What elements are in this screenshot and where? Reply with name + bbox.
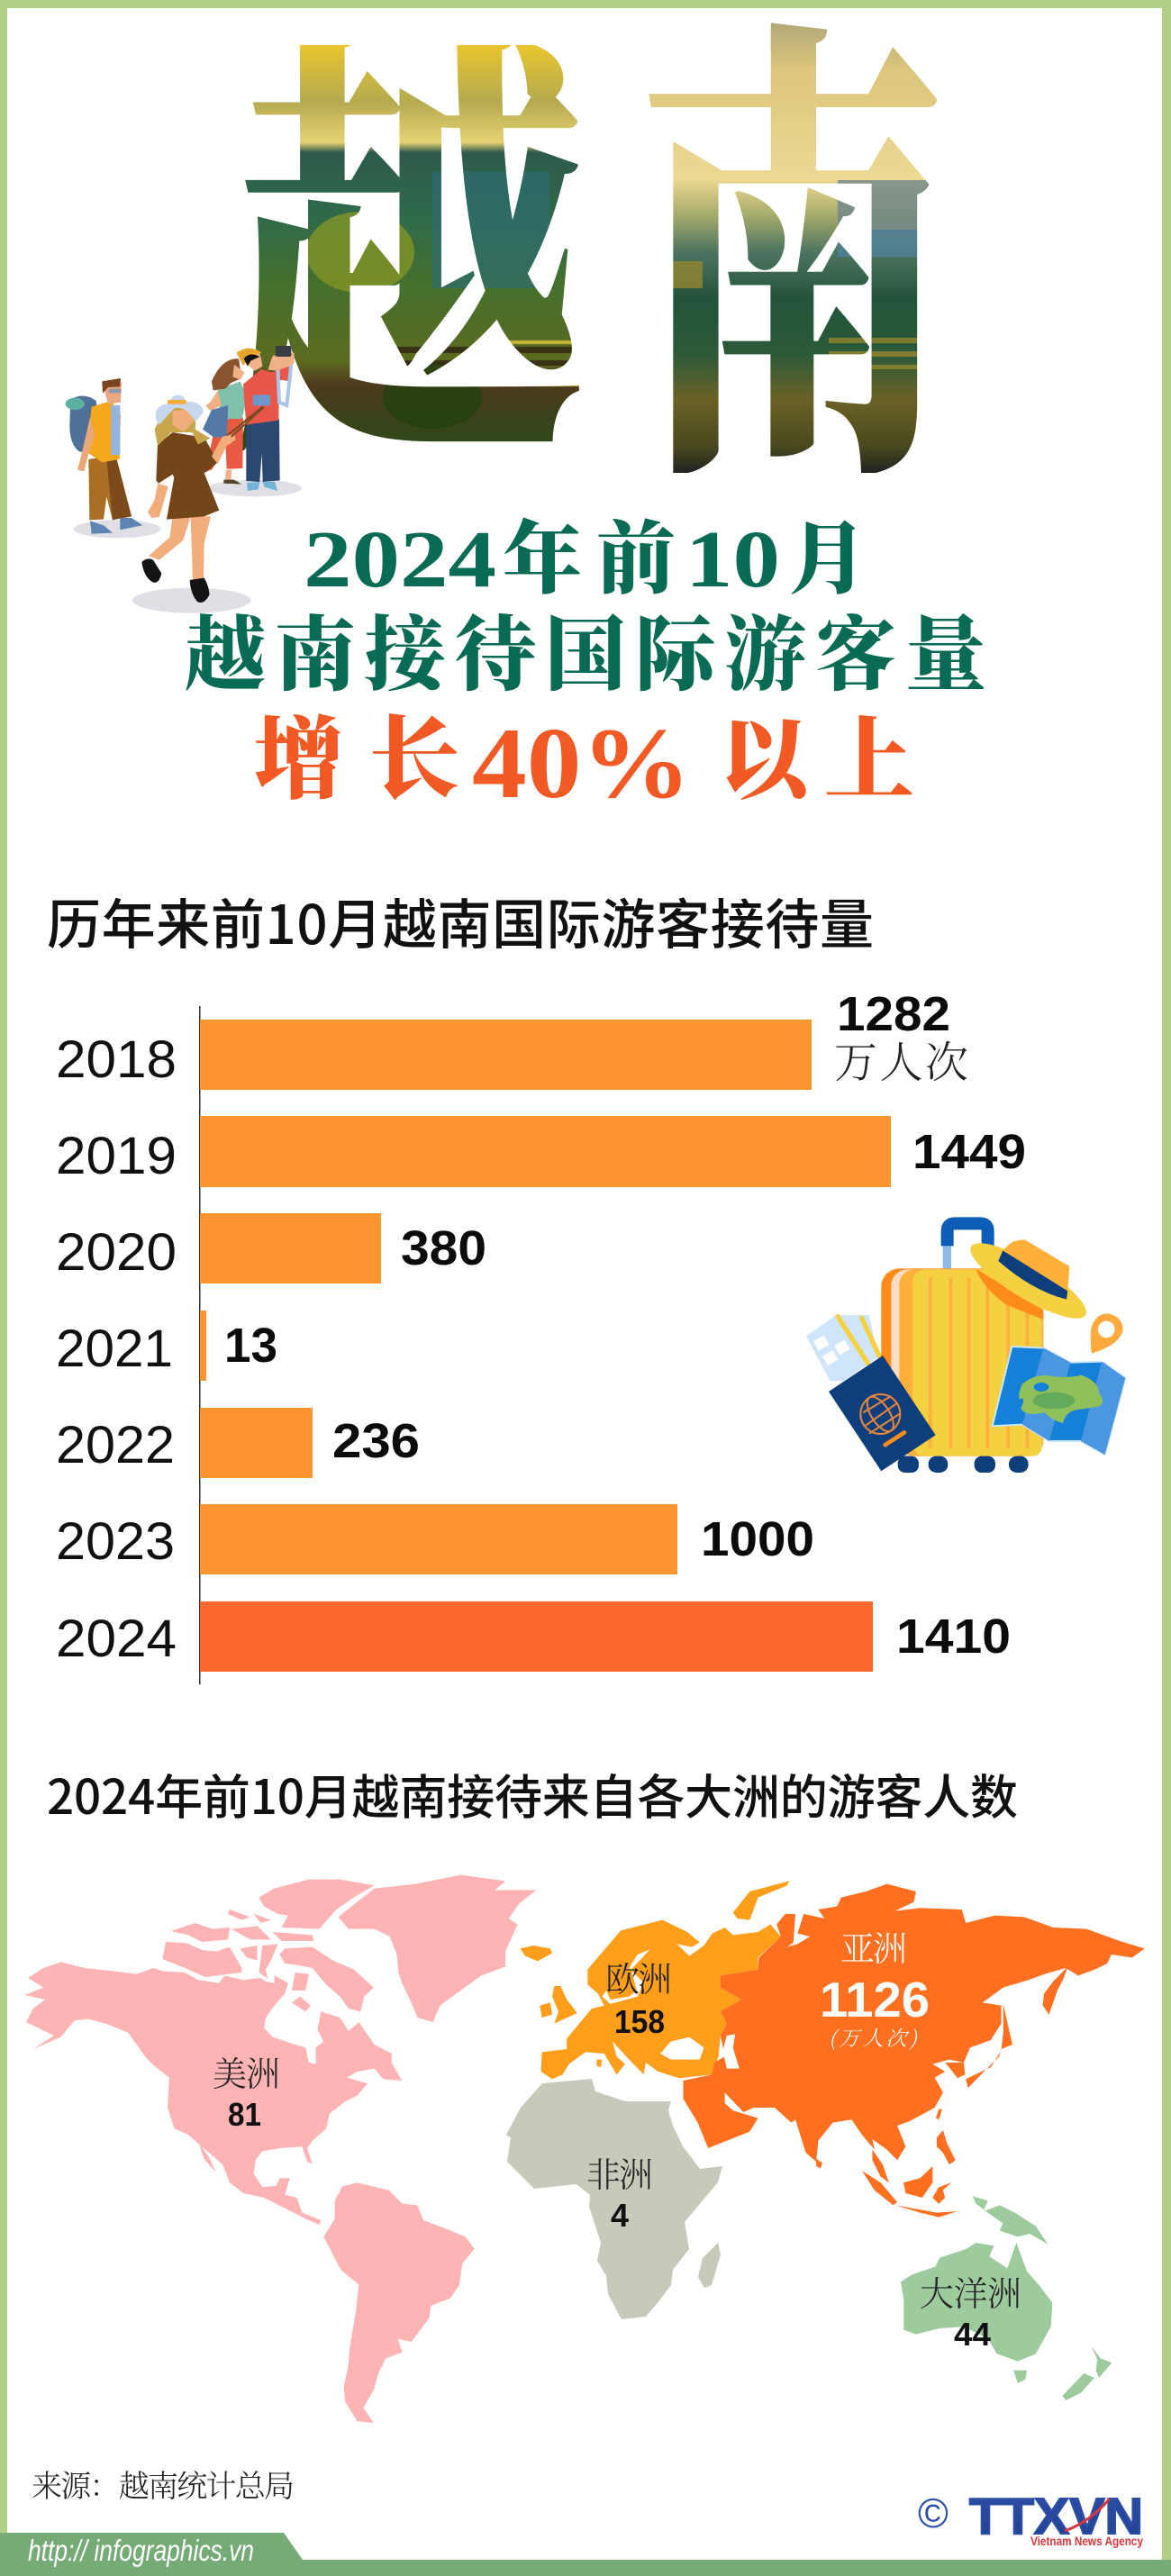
heading: visitors by continent: 2024年前10月越南接待来自各大洲的游客人数 — [47, 1760, 1018, 1828]
bar 2018: 1282 — [837, 987, 950, 1041]
bar 2020 — [56, 1213, 486, 1283]
label: Oceania: 44 — [954, 2316, 991, 2353]
headline: growth above 40%: 长 — [369, 687, 459, 817]
label: Asia: (万人次) — [829, 2022, 918, 2052]
headline: first ten months of 2024 — [304, 496, 867, 610]
bar 2022 — [56, 1408, 420, 1478]
bar 2019: 2019 — [56, 1127, 177, 1185]
bar 2022: 2022 — [56, 1416, 175, 1474]
label: Americas: 81 — [228, 2096, 261, 2133]
map — [993, 1347, 1125, 1455]
logo: TTXVN: TTXVN — [969, 2488, 1143, 2545]
icon: suitcase, hat, passport, map — [806, 1223, 1125, 1473]
label: Asia — [820, 1921, 930, 2052]
label: Oceania: 大洋洲 — [920, 2266, 1021, 2316]
label: Europe — [605, 1952, 672, 2040]
bar 2018: 2018 — [56, 1030, 177, 1089]
headline: first ten months of 2024: 月 — [788, 496, 867, 610]
bar 2023: 2023 — [56, 1512, 175, 1571]
world map — [24, 1875, 1145, 2423]
region: Asia — [683, 1884, 1145, 2218]
bar 2019: 1449 — [912, 1125, 1026, 1179]
bar 2020: 2020 — [56, 1223, 177, 1282]
bar 2021: 2021 — [56, 1320, 173, 1378]
bar 2024: 2024 — [56, 1610, 177, 1668]
headline: first ten months of 2024: 前 — [596, 496, 676, 610]
bar 2023: 1000 — [701, 1512, 814, 1566]
bar 2019 — [56, 1116, 1026, 1187]
bar 2018: 万人次 — [834, 1028, 968, 1090]
label: Africa: 非洲 — [586, 2147, 653, 2197]
label: Oceania — [920, 2266, 1021, 2353]
label: Africa: 4 — [611, 2197, 629, 2234]
bar 2024: 1410 — [896, 1610, 1011, 1664]
bar 2021: 13 — [224, 1319, 277, 1373]
headline: first ten months of 2024: 2024 — [304, 515, 496, 604]
headline: first ten months of 2024: 10 — [685, 515, 780, 604]
region: Europe — [521, 1881, 789, 2079]
headline: growth above 40%: 增 — [254, 687, 344, 817]
label: Europe: 欧洲 — [605, 1952, 672, 2001]
wheels — [898, 1456, 1029, 1473]
region: Africa — [506, 2079, 722, 2319]
handle — [943, 1223, 988, 1273]
logo: TTXVN: © — [918, 2490, 949, 2536]
bar 2021 — [56, 1311, 277, 1381]
big title: Vietnam in textured calligraphy — [233, 0, 947, 565]
bar chart: visitors by year — [56, 987, 1026, 1684]
headline: growth above 40%: 以 — [719, 687, 816, 817]
man with backpack — [66, 378, 160, 538]
couple taking a photo — [203, 346, 302, 496]
pin — [1091, 1313, 1123, 1354]
logo: TTXVN: Vietnam News Agency — [1030, 2535, 1143, 2548]
headline: growth above 40%: 上 — [824, 687, 914, 817]
source note: 来源：越南统计总局 — [32, 2462, 295, 2506]
heading: yearly chart: 历年来前10月越南国际游客接待量 — [47, 882, 874, 960]
label: Americas — [213, 2046, 280, 2133]
bar 2018 — [56, 987, 968, 1090]
suitcase body — [881, 1268, 1043, 1456]
hat — [962, 1231, 1094, 1330]
label: Asia: 亚洲 — [840, 1921, 907, 1971]
headline: first ten months of 2024: 年 — [503, 496, 582, 610]
region: Americas — [24, 1875, 537, 2423]
headline: growth above 40%: 40% — [472, 708, 691, 820]
woman in brown dress — [132, 395, 264, 613]
label: Americas: 美洲 — [213, 2046, 280, 2096]
headline: Vietnam received international visitors: 越南接待国际游客量 — [185, 589, 986, 706]
bar 2024 — [56, 1601, 1011, 1672]
label: Europe: 158 — [614, 2003, 665, 2040]
bar 2022: 236 — [332, 1414, 420, 1468]
footer band with website: http:// infographics.vn — [28, 2534, 254, 2567]
footer band with website — [0, 2533, 1171, 2576]
illustration: tourists — [66, 346, 302, 613]
headline: growth above 40% — [254, 687, 914, 820]
region: Oceania — [901, 2196, 1112, 2400]
bar 2020: 380 — [401, 1221, 486, 1275]
bar 2023 — [56, 1504, 814, 1574]
tickets — [806, 1315, 880, 1381]
label: Africa — [586, 2147, 653, 2234]
passport — [829, 1356, 936, 1471]
label: Asia: 1126 — [820, 1972, 930, 2027]
